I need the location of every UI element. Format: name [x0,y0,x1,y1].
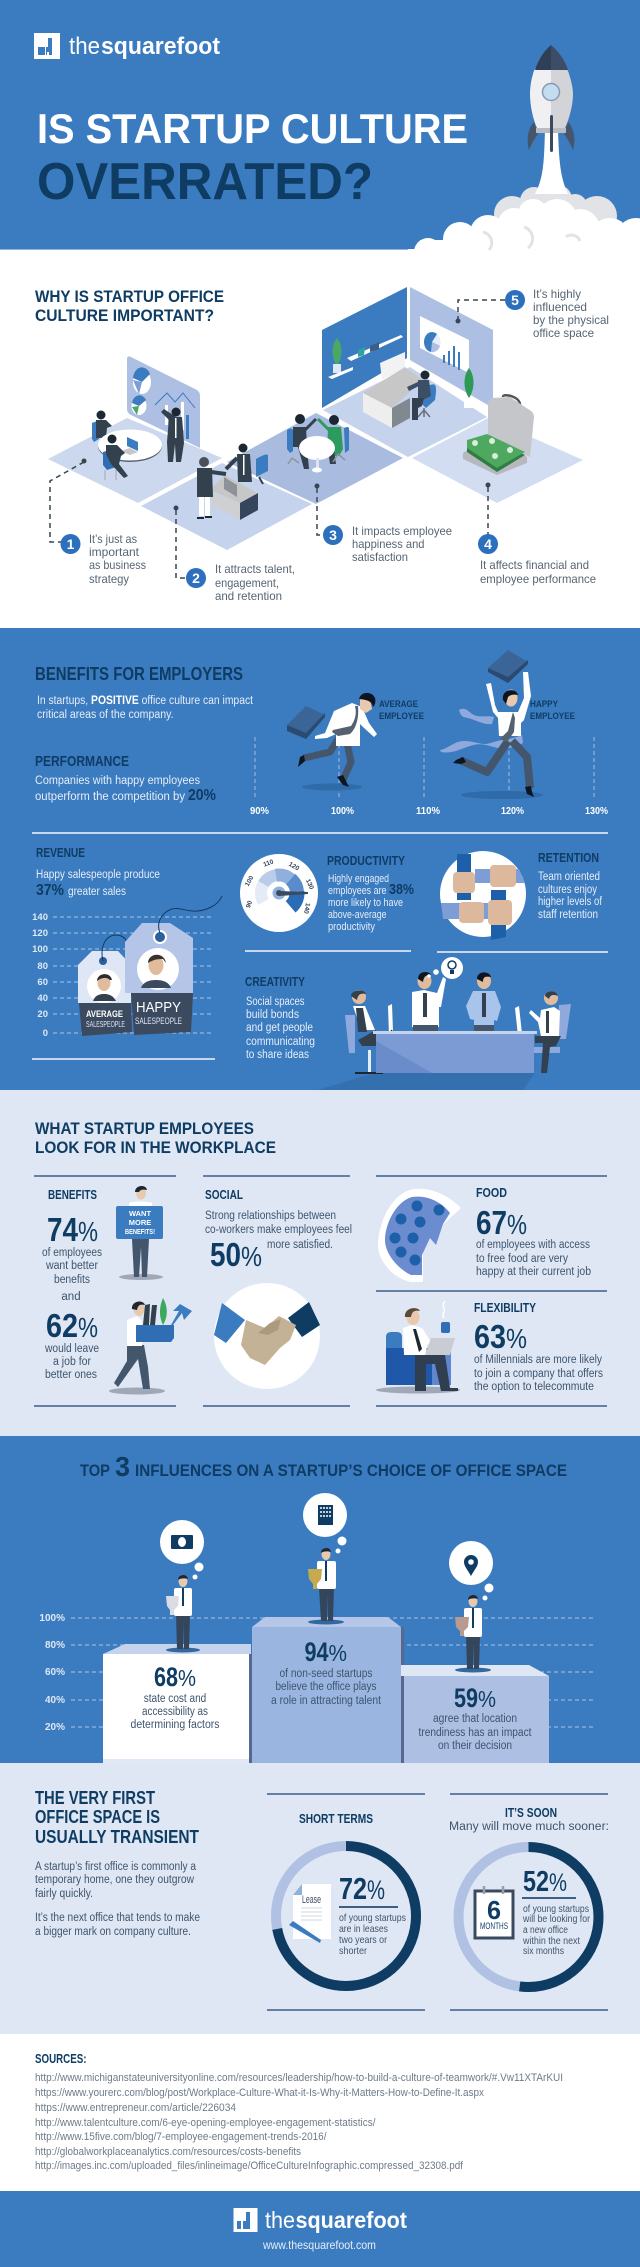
revenue scale: 20 [37,1009,48,1020]
handshake illustration [214,1283,320,1389]
creativity text: CREATIVITY [245,974,305,989]
sources: http://www.talentculture.com/6-eye-opening-employee-engagement-statistics/ [35,2117,376,2129]
rocket [528,45,574,194]
price tag: average salespeople: AVERAGE [86,1009,123,1020]
person with sign [116,1186,163,1280]
left seated person [345,990,396,1073]
performance chart: 110% [416,805,441,817]
happy employee figure [440,650,543,799]
chart grid: 100% [39,1613,65,1624]
callout 4: It affects financial and [480,558,589,572]
retention hands [440,851,526,940]
happy employee label [530,699,575,721]
productivity gauge: 120 [287,861,301,873]
stat 52 percent [522,1866,591,1957]
retention text: Team oriented [538,871,600,883]
stat 52 percent: % [549,1869,567,1897]
stat 52 percent: within the next [522,1936,580,1947]
heading: THE VERY FIRST [35,1788,155,1808]
panel: top 3 influences [0,1436,640,1763]
productivity gauge: 140 [302,902,311,915]
soon heading [449,1806,609,1833]
creativity text: build bonds [246,1009,299,1021]
callout 3 [323,524,452,564]
sources: http://images.inc.com/uploaded_files/inlineimage/OfficeCultureInfographic.compressed_32308.pdf [35,2160,464,2172]
podium 3: % [478,1686,496,1712]
short terms heading: SHORT TERMS [299,1812,373,1826]
chart grid [39,1613,596,1733]
creativity text: communicating [246,1036,315,1048]
callout 1: important [89,545,140,559]
heading [35,1788,199,1847]
logo: squarefoot [101,33,220,60]
heading: 3 [115,1451,130,1482]
desk and worker [363,352,436,428]
performance text: PERFORMANCE [35,753,129,770]
productivity gauge: 110 [262,858,275,869]
title: OVERRATED? [37,153,373,211]
donut 72 percent [276,1846,416,1986]
creativity text [245,974,315,1061]
wall charts and plants [132,332,474,439]
revenue scale: 60 [37,977,48,988]
handshake at desk [197,444,268,520]
callout 2: and retention [215,589,282,603]
callout 2 [186,562,295,603]
callout 4 [478,534,596,586]
productivity text: 38% [389,881,414,898]
sources: http://www.15five.com/blog/7-employee-engagement-trends-2016/ [35,2131,327,2143]
revenue scale: 140 [32,912,48,923]
donut 52 percent [458,1847,598,1987]
callout 3: It impacts employee [352,524,452,538]
productivity text: Highly engaged [328,873,389,885]
podium 2: of non-seed startups [280,1668,373,1680]
podium 3: 59 [454,1683,478,1713]
podium 2: believe the office plays [276,1681,377,1693]
benefits text: would leave [44,1343,99,1355]
revenue scale: 100 [32,944,48,955]
briefcase of money [463,395,534,475]
meeting table group [92,408,184,480]
sources: SOURCES: [35,2052,86,2066]
productivity gauge: 100 [244,874,256,888]
stat 72 percent: % [367,1875,385,1905]
callout 1 [60,532,146,586]
podium 1: state cost and [144,1693,206,1705]
calendar icon: 6 [487,1895,501,1925]
panel: benefits for employers [0,628,640,1091]
body text: a bigger mark on company culture. [35,1926,191,1938]
body text: It’s the next office that tends to make [35,1912,200,1924]
podium 3: trendiness has an impact [418,1727,532,1739]
podium 1: accessibility as [142,1706,208,1718]
soon heading: IT’S SOON [505,1806,557,1820]
person with trophy 1 and money thought [160,1520,204,1652]
performance text: outperform the competition by [35,791,185,803]
smoke clouds [414,185,640,266]
back walls [127,287,493,448]
social text: more satisfied. [267,1239,333,1251]
heading: WHAT STARTUP EMPLOYEES [35,1119,254,1138]
callout 2: engagement, [215,576,279,590]
food text: of employees with access [476,1239,590,1251]
podium 1: % [178,1665,196,1691]
performance chart: 120% [501,805,525,817]
three people at round table [287,414,349,472]
footer logo [234,2207,407,2233]
average employee label [379,699,424,721]
footer logo: the [265,2207,295,2233]
benefits text: better ones [45,1369,97,1381]
productivity gauge: 90 [245,900,254,909]
sources: http://www.michiganstateuniversityonline.com/resources/leadership/how-to-build-a-culture-of-teamwork/#.Vw11XTArKUI [35,2072,563,2084]
leader pins [82,318,490,510]
heading: why is startup office culture important: CULTURE IMPORTANT? [35,306,214,325]
benefits text: and [61,1291,81,1303]
footer url: www.thesquarefoot.com [262,2238,376,2252]
callout 5: 5 [511,292,519,308]
heading: INFLUENCES ON A STARTUP’S CHOICE OF OFFICE SPACE [135,1461,567,1480]
benefits text [42,1188,102,1381]
header band [0,0,640,266]
heading: USUALLY TRANSIENT [35,1827,199,1847]
floor tiles [48,367,583,550]
benefits text: want better [45,1260,98,1272]
benefits text: 74 [47,1211,79,1248]
stat 72 percent: two years or [339,1934,387,1946]
chart grid: 80% [45,1640,65,1651]
callout 3: satisfaction [352,550,408,564]
productivity text: employees are [328,885,386,897]
callout 5 [505,287,609,340]
title: IS STARTUP CULTURE [37,105,468,152]
flexibility text: FLEXIBILITY [474,1301,537,1315]
performance chart: 130% [585,805,609,817]
callout 4: 4 [484,536,492,552]
intro text: In startups, POSITIVE office culture can impact [37,695,254,707]
telecommuter illustration [376,1301,460,1394]
intro text: critical areas of the company. [37,709,174,721]
benefits text: BENEFITS [48,1188,97,1202]
performance chart [250,737,609,817]
stat 72 percent: shorter [339,1945,367,1957]
chart grid: 40% [45,1695,65,1706]
retention text: higher levels of [538,896,603,908]
performance chart: 100% [331,805,355,817]
heading: benefits: BENEFITS FOR EMPLOYERS [35,664,243,684]
podium 1: determining factors [130,1719,220,1731]
stat 72 percent [339,1871,406,1957]
average employee label: AVERAGE [379,699,418,709]
social text: 50 [210,1236,241,1273]
stat 52 percent: six months [523,1946,564,1957]
benefits text: a job for [53,1356,91,1368]
revenue text: greater sales [68,886,126,898]
callout 1: as business [89,558,146,572]
flexibility text: 63 [474,1318,506,1355]
productivity text: PRODUCTIVITY [327,853,405,868]
revenue scale: 80 [37,961,48,972]
food text: % [507,1209,527,1240]
person with blue shirt [466,972,501,1033]
flexibility text: to join a company that offers [474,1368,603,1380]
stat 72 percent: of young startups [339,1912,406,1924]
callout 1: strategy [89,572,129,586]
sources: http://globalworkplaceanalytics.com/resources/costs-benefits [35,2146,301,2158]
person with trophy 3 and location thought [449,1541,494,1672]
stat 52 percent: of young startups [523,1904,589,1915]
retention text: cultures enjoy [538,884,597,896]
happy employee label: EMPLOYEE [530,711,575,721]
sources: https://www.entrepreneur.com/article/226034 [35,2102,236,2114]
lease document icon [289,1884,331,1943]
lease document icon: Lease [302,1894,321,1906]
productivity text: more likely to have [328,897,403,909]
benefits text: 62 [46,1307,78,1344]
productivity text [327,853,414,933]
person carrying box [109,1298,192,1394]
chart grid: 60% [45,1667,65,1678]
person with trophy 2 and building thought [303,1493,347,1624]
heading: why is startup office culture important [35,287,224,325]
podium 3: agree that location [433,1713,517,1725]
retention text [538,850,603,921]
social text: SOCIAL [205,1188,243,1202]
thinking person with white shirt [412,972,446,1033]
right seated person [515,991,571,1073]
callout 5: It’s highly [533,287,581,301]
price tag: average salespeople: SALESPEOPLE [86,1020,125,1029]
podium 2: 94 [304,1637,328,1667]
calendar icon [475,1886,513,1938]
panel: what startup employees look for [0,1090,640,1436]
callout 5: by the physical [533,313,609,327]
flexibility text: the option to telecommute [474,1381,594,1393]
logo: the [69,33,100,60]
intro text [37,695,254,721]
creativity text: and get people [246,1022,313,1034]
food text: FOOD [476,1186,507,1200]
stat 52 percent: 52 [523,1866,549,1898]
price tag: happy salespeople: SALESPEOPLE [135,1016,182,1026]
benefits text: benefits [54,1274,90,1286]
stat 72 percent: are in leases [339,1923,388,1935]
average employee label: EMPLOYEE [379,711,424,721]
podium 2 [252,1617,404,1763]
creativity meeting illustration [314,957,571,1091]
food text: happy at their current job [476,1266,591,1278]
social text [205,1188,352,1273]
creativity text: to share ideas [246,1049,309,1061]
revenue scale [32,912,214,1039]
food text [476,1186,591,1278]
social text: co-workers make employees feel [205,1224,352,1236]
productivity gauge: 130 [304,878,315,891]
callout 2: It attracts talent, [215,562,295,576]
flexibility text [474,1301,603,1393]
revenue text: 37% [36,882,64,899]
body text: fairly quickly. [35,1888,93,1900]
productivity text: productivity [328,921,375,933]
soon heading: Many will move much sooner: [449,1821,609,1833]
performance text: 20% [188,787,216,804]
benefits text: of employees [42,1247,102,1259]
heading: TOP [80,1461,110,1480]
callout 5: office space [533,326,594,340]
stat 52 percent: a new office [523,1925,568,1936]
performance text: Companies with happy employees [35,775,200,787]
title [37,105,468,211]
happy employee label: HAPPY [530,699,558,709]
person with sign: BENEFITS! [125,1227,155,1236]
social text: Strong relationships between [205,1210,336,1222]
callouts: dashed leaders [50,300,505,578]
footer [0,2191,640,2267]
sources [35,2052,563,2172]
logo [34,33,220,60]
callout 2: 2 [192,570,200,586]
benefits text: % [78,1216,98,1247]
revenue scale: 0 [43,1028,48,1039]
stat 72 percent: 72 [339,1871,367,1906]
callout 3: 3 [329,527,337,543]
podium 1 [103,1644,252,1763]
performance chart: 90% [250,805,270,817]
callout 1: 1 [67,536,75,552]
heading: LOOK FOR IN THE WORKPLACE [35,1138,276,1157]
heading: OFFICE SPACE IS [35,1807,160,1827]
podium 3: on their decision [438,1740,512,1752]
idea bubble [427,957,463,979]
heading [35,1119,276,1157]
retention text: RETENTION [538,850,599,865]
flexibility text: of Millennials are more likely [474,1354,602,1366]
body text [35,1861,200,1938]
revenue scale: 120 [32,928,48,939]
flexibility text: % [506,1323,527,1354]
chart grid: 20% [45,1722,65,1733]
productivity text: above-average [328,909,386,921]
food text: to free food are very [476,1253,568,1265]
revenue text [36,845,160,899]
average employee figure [287,693,377,790]
callout 5: influenced [533,300,587,314]
podium 2: % [328,1640,347,1666]
callout 1: It’s just as [89,532,137,546]
revenue scale: 40 [37,993,48,1004]
person with sign: WANT [129,1209,151,1218]
heading [80,1451,567,1482]
revenue text: REVENUE [36,845,85,860]
body text: temporary home, one they outgrow [35,1874,195,1886]
performance text [35,753,216,804]
stat 52 percent: will be looking for [522,1914,591,1925]
retention text: staff retention [538,909,598,921]
benefits text: % [78,1312,98,1343]
panel: the very first office space [0,1763,640,2034]
revenue text: Happy salespeople produce [36,869,160,881]
price tag: happy salespeople: HAPPY [136,999,181,1016]
podium 2: a role in attracting talent [271,1695,382,1707]
podium 3 [401,1665,549,1763]
social text: % [241,1241,262,1272]
creativity text: Social spaces [246,996,305,1008]
podium 1: 68 [154,1662,178,1692]
callout 3: happiness and [352,537,424,551]
price tag: happy salespeople [125,896,222,1035]
productivity gauge [240,854,318,932]
calendar icon: MONTHS [480,1921,508,1931]
price tag: average salespeople [78,935,132,1036]
callout 4: employee performance [480,572,596,586]
sources: https://www.yourerc.com/blog/post/Workplace-Culture-What-it-Is-Why-it-Matters-How-to-Define-It.aspx [35,2087,484,2099]
pizza illustration [378,1189,461,1282]
food text: 67 [476,1204,507,1241]
heading: why is startup office culture important: WHY IS STARTUP OFFICE [35,287,224,306]
body text: A startup’s first office is commonly a [35,1861,197,1873]
isometric office illustration [48,287,583,550]
footer logo: squarefoot [296,2207,407,2233]
person with sign: MORE [129,1218,151,1227]
